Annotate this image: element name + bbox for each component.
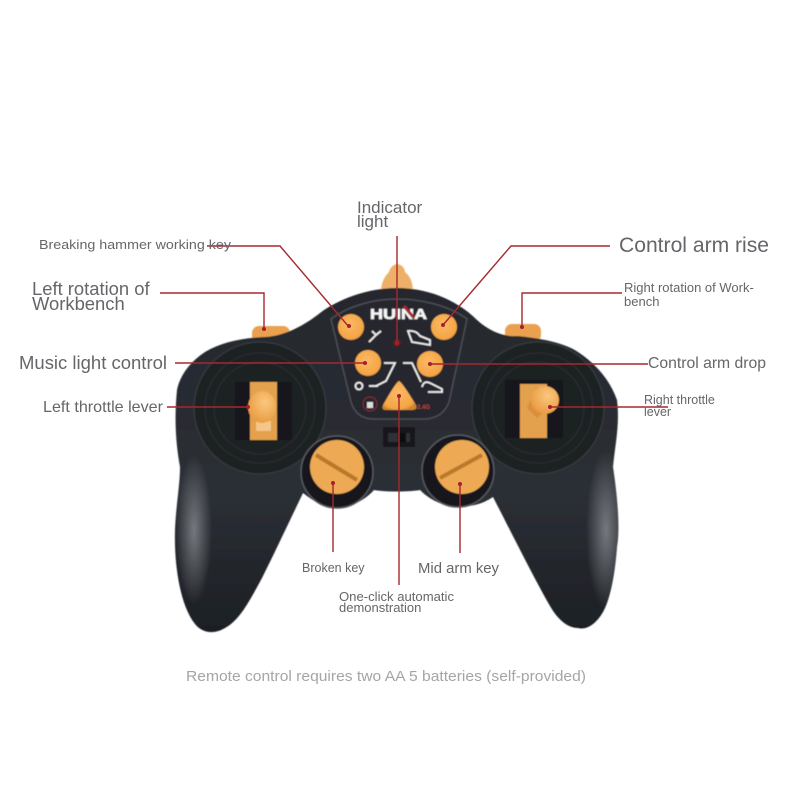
centre panel bbox=[331, 299, 467, 419]
label: right throttle lever: Right throttle bbox=[644, 393, 715, 407]
right shoulder button bbox=[505, 324, 541, 342]
power and frequency marks bbox=[367, 340, 430, 411]
power switch bbox=[383, 427, 415, 447]
panel buttons bbox=[338, 314, 457, 410]
leader end dots bbox=[246, 323, 552, 486]
left thumb dial bbox=[301, 436, 373, 508]
footer note: Remote control requires two AA 5 batteries (self-provided) bbox=[186, 668, 586, 685]
left joystick well bbox=[194, 342, 326, 474]
label: mid arm key: Mid arm key bbox=[418, 560, 499, 577]
label: broken key: Broken key bbox=[302, 561, 365, 575]
leader lines bbox=[160, 236, 668, 585]
grip highlights bbox=[176, 450, 626, 610]
label: left rotation of workbench: Workbench bbox=[32, 293, 125, 314]
label: left rotation of workbench: Left rotation of bbox=[32, 278, 150, 299]
label: control arm drop: Control arm drop bbox=[648, 355, 766, 372]
label: right rotation of workbench: bench bbox=[624, 294, 659, 309]
right thumb dial bbox=[422, 435, 494, 507]
label: indicator light: light bbox=[357, 212, 388, 231]
label: one-click automatic demonstration bbox=[339, 589, 454, 615]
top antenna bbox=[381, 264, 413, 292]
label: one-click automatic demonstration: One-click automatic bbox=[339, 589, 454, 604]
right joystick well bbox=[472, 342, 604, 474]
label: music light control: Music light control bbox=[19, 353, 167, 373]
label: right throttle lever: lever bbox=[644, 405, 671, 419]
controller body bbox=[175, 288, 618, 632]
label: one-click automatic demonstration: demonstration bbox=[339, 600, 421, 615]
panel icons bbox=[356, 331, 442, 411]
label: indicator light: Indicator bbox=[357, 198, 422, 217]
label: left throttle lever: Left throttle lever bbox=[43, 399, 164, 416]
label: breaking hammer working key: Breaking hammer working key bbox=[39, 237, 232, 252]
controller bbox=[175, 264, 626, 632]
infographic: remote control diagram bbox=[20, 201, 768, 684]
power and frequency marks: 2.4G bbox=[417, 405, 430, 411]
left shoulder button bbox=[252, 326, 290, 344]
label: control arm rise: Control arm rise bbox=[619, 234, 769, 257]
brand logo: HUINA bbox=[370, 306, 427, 323]
label: right rotation of workbench: Right rotation of Work- bbox=[624, 280, 754, 295]
